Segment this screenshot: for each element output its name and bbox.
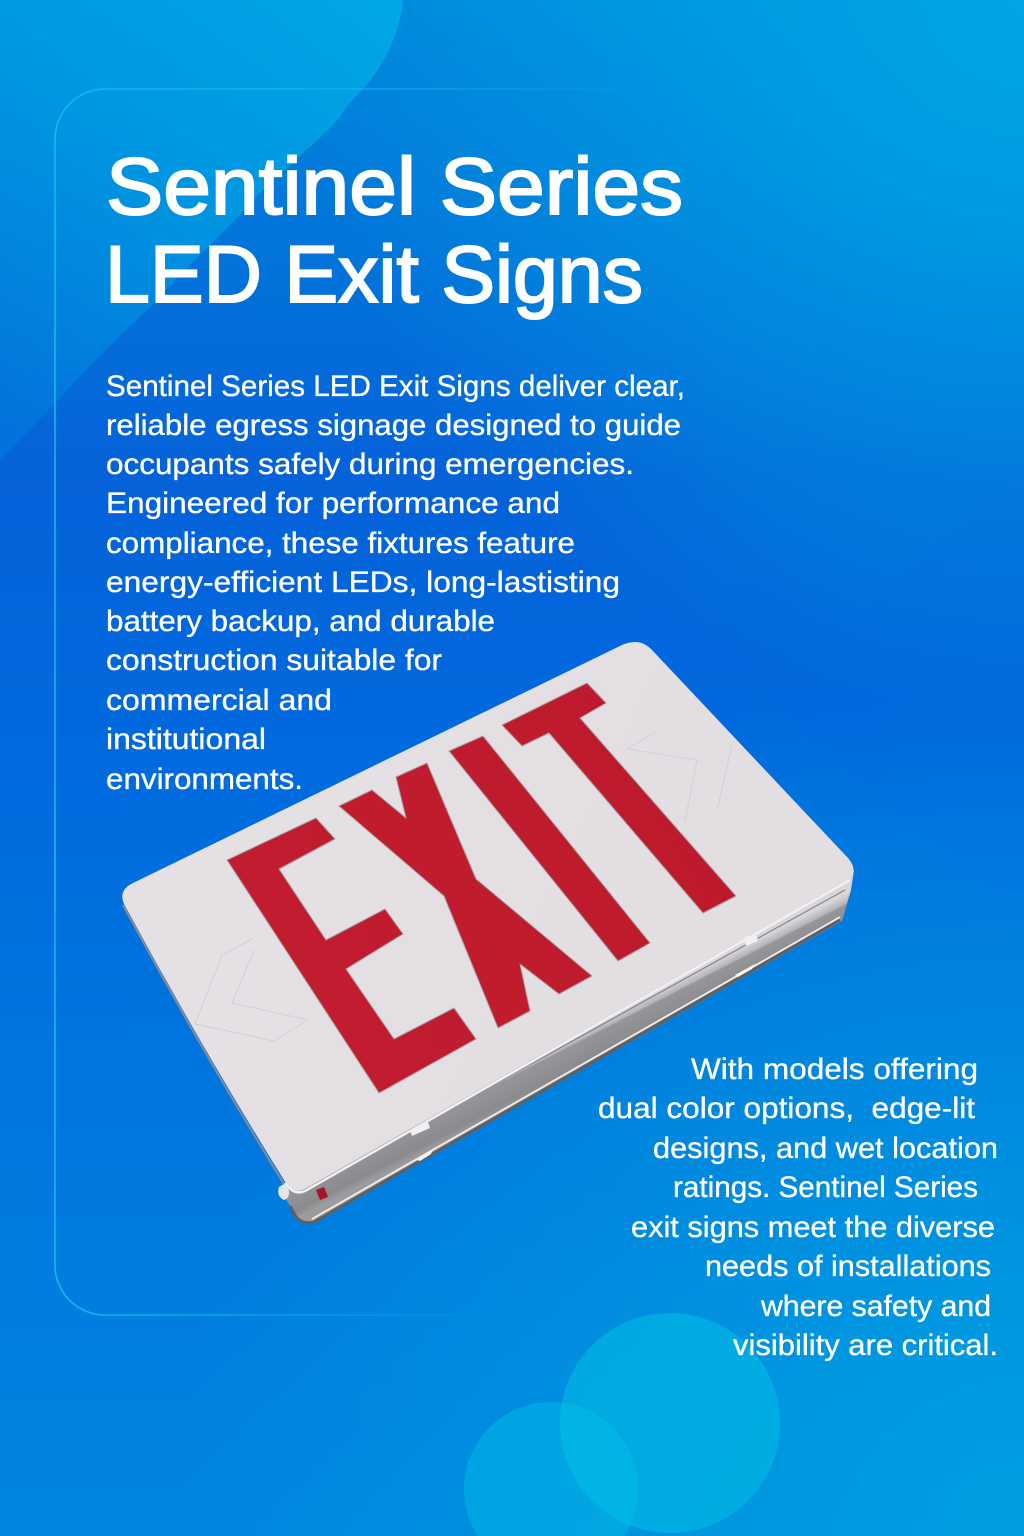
letter X — [339, 763, 592, 1028]
red test indicator — [316, 1187, 328, 1200]
description text: left: environments. — [106, 763, 303, 796]
housing glints — [417, 964, 755, 1161]
description text: left: occupants safely during emergencies. — [106, 448, 634, 481]
description text: right — [598, 1053, 998, 1362]
housing lower trim — [290, 920, 840, 1223]
description text: right: exit signs meet the diverse — [631, 1211, 995, 1244]
description text: right: With models offering — [691, 1053, 978, 1086]
description text: left: energy-efficient LEDs, long-lastisting — [106, 566, 620, 599]
rounded panel outline — [55, 89, 656, 1315]
sign left edge shadow — [123, 905, 284, 1184]
letter T — [502, 683, 736, 913]
title: LED Exit Signs — [105, 230, 643, 320]
description text: right: needs of installations — [705, 1250, 991, 1283]
description text: left: reliable egress signage designed to guide — [106, 409, 681, 442]
description text: left: construction suitable for — [106, 644, 442, 677]
description text: left: commercial and — [106, 684, 332, 717]
description text: right: designs, and wet location — [653, 1132, 998, 1165]
description text: left: compliance, these fixtures feature — [106, 527, 575, 560]
letter E — [227, 818, 476, 1093]
description text: right: dual color options, edge-lit — [598, 1092, 976, 1125]
sign housing side — [284, 870, 854, 1223]
background circle: large — [560, 1313, 780, 1533]
face lower bevel — [285, 880, 850, 1192]
letter I — [449, 736, 650, 961]
title: Sentinel Series — [106, 142, 683, 232]
description text: left — [106, 370, 685, 796]
housing seam — [300, 890, 845, 1192]
housing highlight line — [312, 917, 840, 1219]
exit sign product image — [122, 642, 854, 1223]
description text: left: Engineered for performance and — [106, 487, 560, 520]
background circle: small — [464, 1402, 638, 1536]
description text: right: where safety and — [760, 1290, 991, 1323]
description text: left: battery backup, and durable — [106, 605, 495, 638]
clip tabs — [410, 933, 758, 1136]
embossed left chevron — [195, 938, 308, 1041]
title — [105, 142, 683, 320]
embossed right chevron — [627, 731, 732, 821]
left clip tab — [278, 1184, 289, 1200]
description text: right: visibility are critical. — [733, 1329, 998, 1362]
description text: left: institutional — [106, 723, 266, 756]
description text: left: Sentinel Series LED Exit Signs deliver clear, — [106, 370, 685, 403]
sign face — [122, 642, 854, 1191]
background shape: upper-left blob — [0, 0, 403, 460]
description text: right: ratings. Sentinel Series — [673, 1171, 978, 1204]
